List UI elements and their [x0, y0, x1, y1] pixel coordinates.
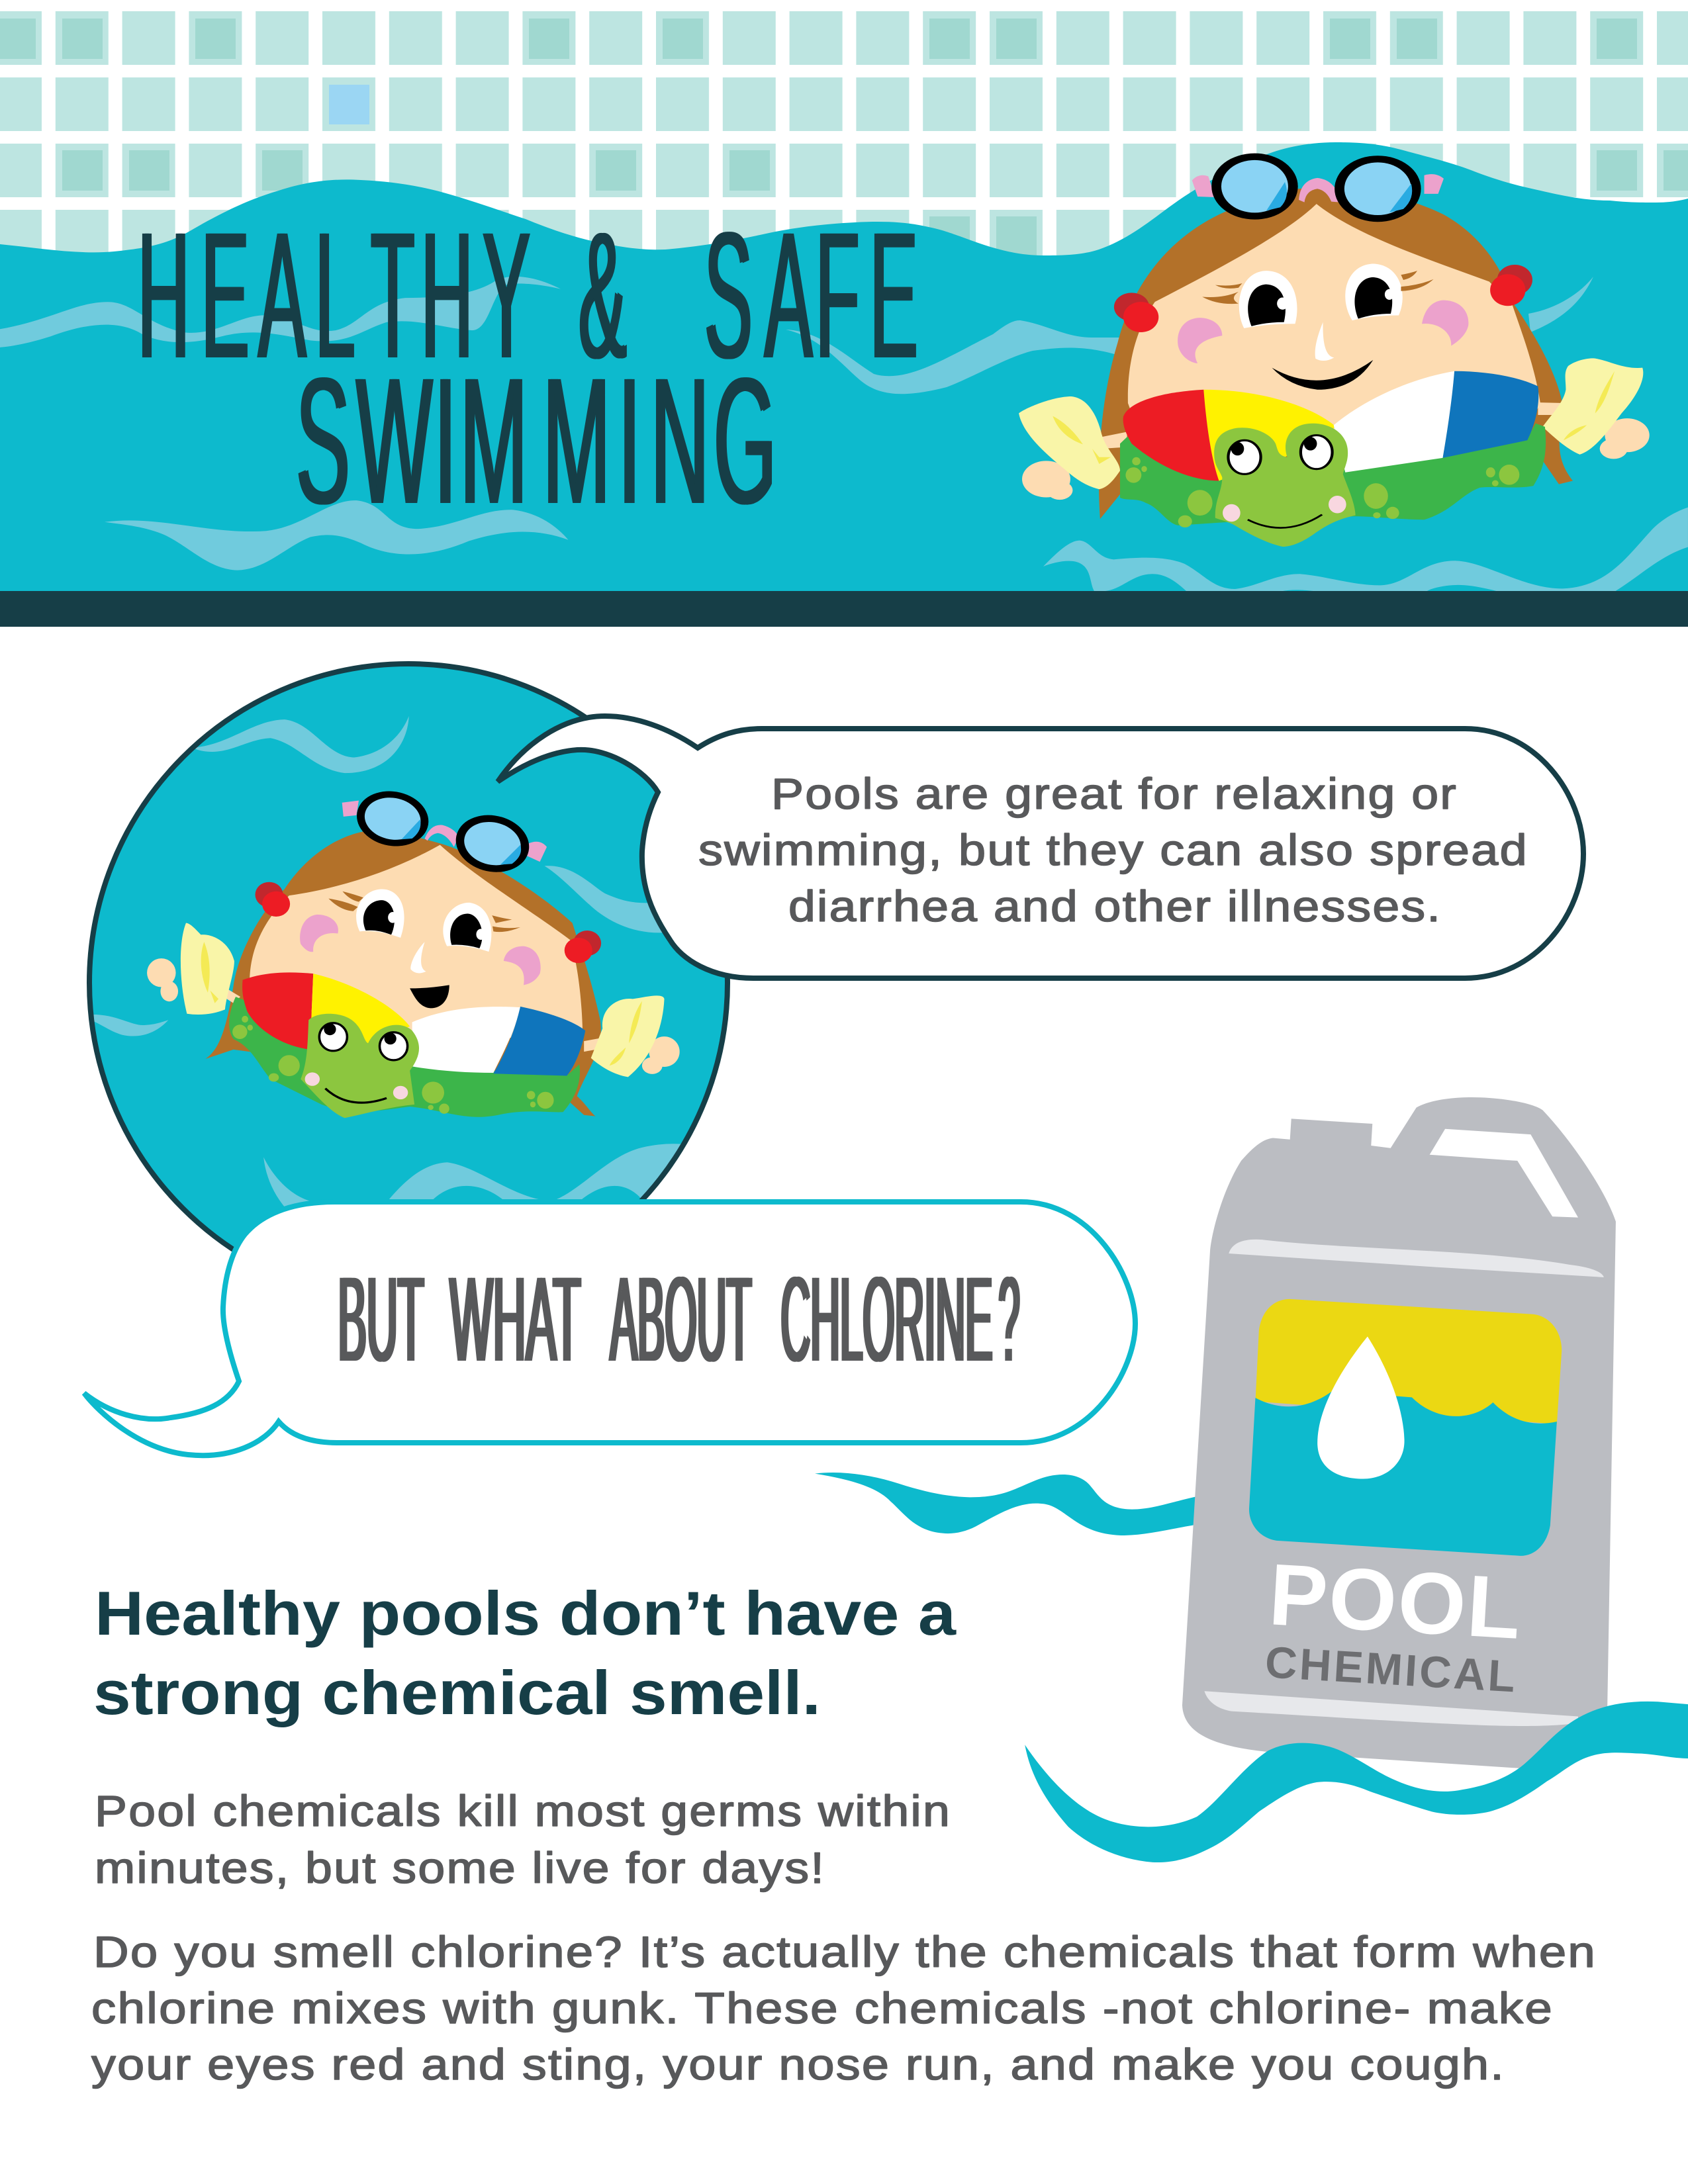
hair [1099, 188, 1573, 519]
wave: upper teal ribbon [815, 1473, 1201, 1535]
beach ball [242, 972, 585, 1075]
jug body [1182, 1097, 1616, 1768]
speech bubble: chlorine question: ? [997, 1251, 1018, 1387]
text block: pool chemicals [95, 1786, 951, 1892]
jug text: chemical: CHEMICAL [1264, 1637, 1519, 1702]
panel: header water [0, 142, 1688, 591]
wave: header right [1528, 277, 1593, 332]
frog cheeks and smile [305, 1072, 408, 1103]
hair ties [256, 882, 601, 963]
speech bubble: chlorine question [84, 1202, 1135, 1455]
title: SWIMMING [295, 340, 775, 541]
armbands [1019, 358, 1643, 489]
frog head [1214, 424, 1356, 547]
divider band [0, 591, 1688, 627]
text block: smell chlorine: Do you smell chlorine? It’s actually the chemicals that form when [93, 1927, 1597, 1976]
goggles [350, 784, 538, 880]
face [250, 845, 583, 1050]
illustration: girl swimmer in circle [147, 784, 680, 1118]
heading: healthy pools: strong chemical smell. [93, 1658, 821, 1727]
hair [205, 829, 601, 1116]
title: HEALTHY & SAFE [136, 194, 917, 396]
speech bubble: pools [498, 716, 1583, 978]
hands [1022, 418, 1650, 500]
frog float body [229, 997, 580, 1117]
jug text: pool: POOL [1266, 1545, 1524, 1657]
icon: water drop [1317, 1336, 1405, 1479]
goggle strap [342, 801, 547, 862]
bubble text: swimming, but they can also spread [698, 825, 1528, 874]
cheeks [300, 915, 541, 985]
wave: lower teal ribbon [1025, 1702, 1688, 1862]
arms [1102, 402, 1568, 449]
bubble text [698, 769, 1528, 931]
heading: healthy pools [93, 1578, 957, 1727]
frog eyes [1228, 435, 1333, 474]
arms [217, 984, 607, 1052]
bubble text: Pools are great for relaxing or [771, 769, 1458, 818]
text block: smell chlorine: chlorine mixes with gunk. These chemicals -not chlorine- make [91, 1983, 1554, 2032]
question text [336, 1251, 1018, 1387]
goggles [1211, 154, 1421, 222]
jug label: yellow [1255, 1299, 1562, 1424]
nose [1315, 322, 1334, 361]
bubble text: diarrhea and other illnesses. [788, 882, 1442, 931]
eyes [1202, 263, 1434, 328]
goggle bridge [425, 825, 459, 847]
frog head [301, 1014, 419, 1118]
illustration: girl swimmer with frog float in header [1019, 154, 1650, 547]
frog cheeks and smile [1223, 496, 1346, 528]
nose [410, 942, 426, 973]
question text: ABOUT [608, 1251, 750, 1387]
frog eyes [319, 1023, 408, 1060]
frog float body [1120, 424, 1546, 525]
speech bubble: chlorine question: CHLORINE [779, 1251, 991, 1387]
mouth [410, 985, 449, 1008]
armbands [181, 923, 665, 1077]
face [1128, 204, 1540, 451]
wave: header lower right [1043, 508, 1688, 591]
goggle strap [1192, 174, 1444, 197]
wave: header middle [786, 320, 1125, 394]
panel: circle scene [89, 664, 727, 1302]
icon: pool chemical jug [1182, 1097, 1616, 1768]
text block: pool chemicals: minutes, but some live for days! [95, 1843, 825, 1892]
frog spots [1125, 457, 1519, 527]
goggle bridge [1299, 178, 1340, 203]
text block: pool chemicals: Pool chemicals kill most germs within [95, 1786, 951, 1835]
hair ties [1114, 265, 1532, 332]
hands [147, 958, 680, 1074]
wave: header left [0, 277, 568, 570]
title [136, 194, 917, 541]
jug label: teal water [1249, 1391, 1557, 1556]
smile [1272, 360, 1373, 390]
jug highlights [1204, 1240, 1604, 1726]
eyes [328, 889, 520, 952]
frog spots [232, 1016, 554, 1114]
question text: BUT [336, 1251, 422, 1387]
heading: healthy pools: Healthy pools don’t have a [95, 1578, 957, 1648]
text block: smell chlorine [91, 1927, 1597, 2089]
panel: tiled pool wall [0, 11, 1688, 276]
text block: smell chlorine: your eyes red and sting, your nose run, and make you cough. [91, 2040, 1505, 2089]
question text: WHAT [448, 1251, 579, 1387]
cheeks [1178, 300, 1468, 363]
beach ball [1123, 371, 1538, 481]
waves inside circle [89, 716, 688, 1212]
